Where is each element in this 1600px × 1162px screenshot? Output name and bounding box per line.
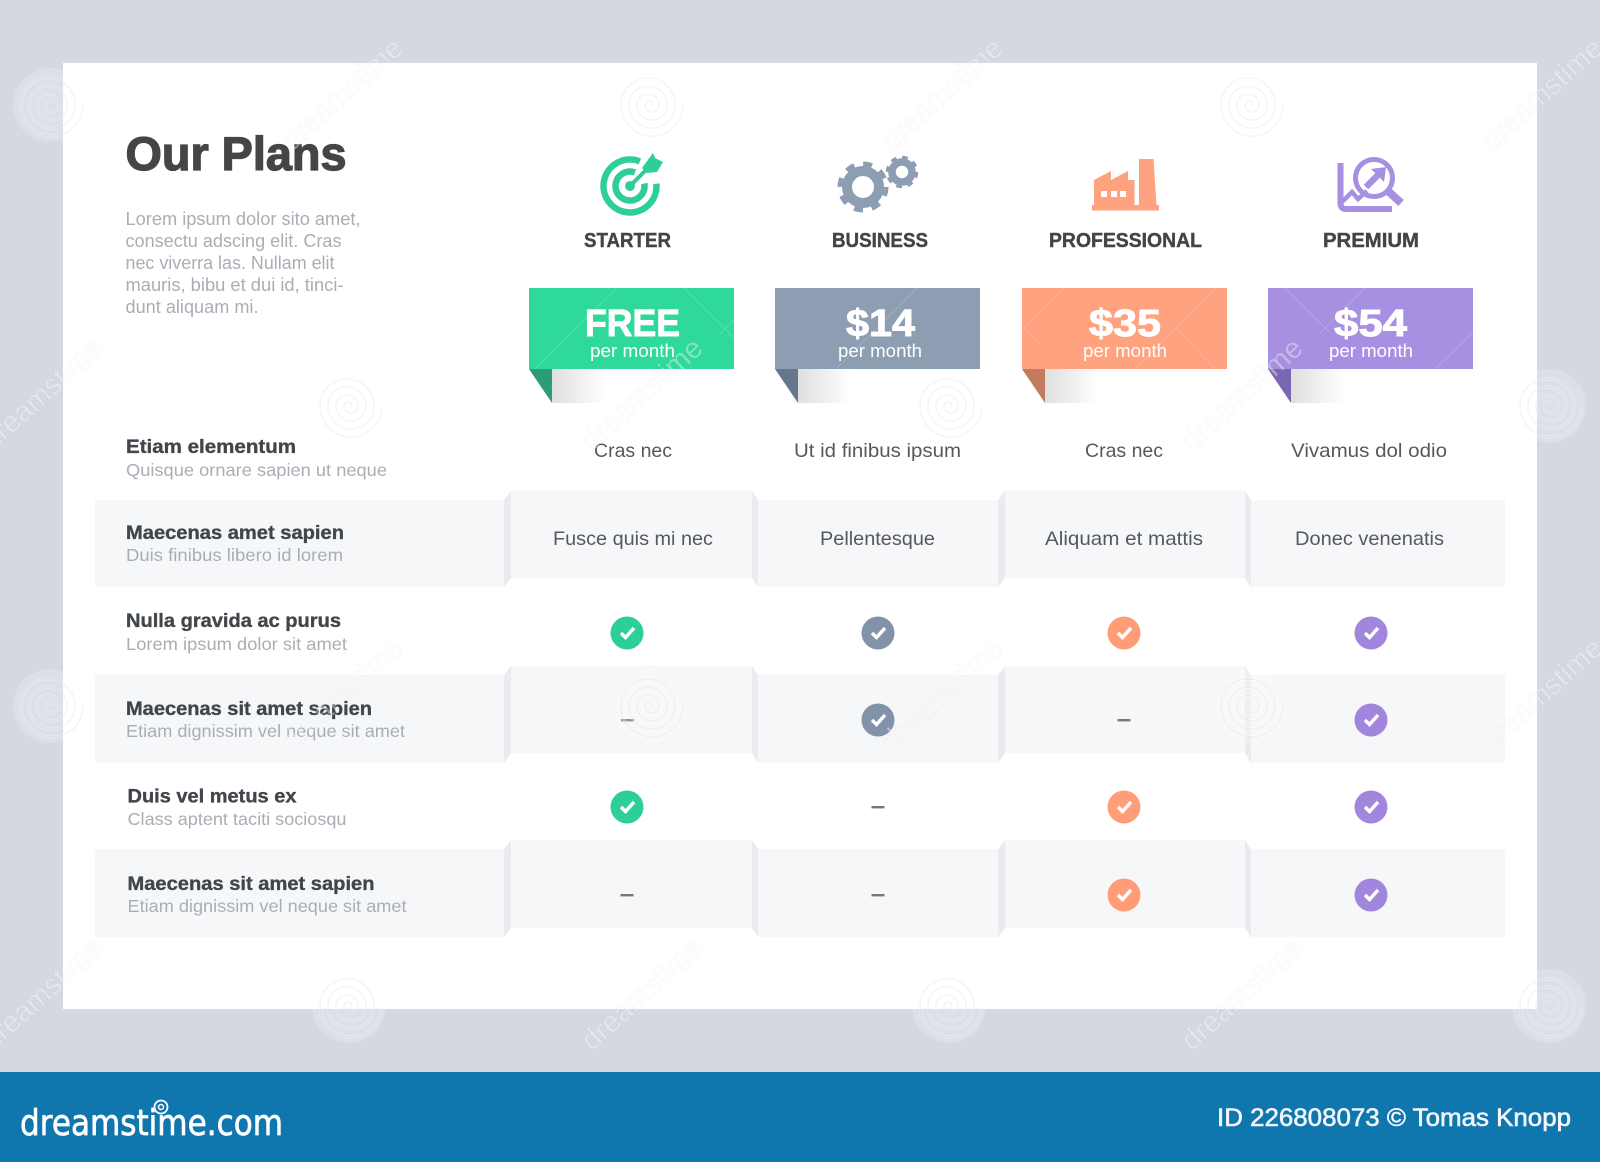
row label: Duis finibus libero id lorem bbox=[126, 545, 343, 565]
watermark overlay: dreamstime bbox=[1175, 932, 1309, 1057]
row label: Lorem ipsum dolor sit amet bbox=[126, 634, 347, 654]
row label bbox=[126, 699, 405, 741]
price badge: FREE bbox=[585, 303, 680, 345]
row values: Vivamus dol odio bbox=[1291, 440, 1447, 462]
row label: Quisque ornare sapien ut neque bbox=[126, 460, 387, 480]
price badge bbox=[1268, 288, 1473, 403]
watermark overlay: dreamstime bbox=[575, 932, 709, 1057]
check: starter bbox=[610, 790, 644, 824]
price badge bbox=[529, 288, 734, 403]
check: business bbox=[862, 616, 894, 650]
check: premium bbox=[1354, 704, 1388, 736]
icon: magnifier over chart bbox=[1340, 160, 1401, 209]
dash: professional bbox=[1118, 719, 1130, 721]
plan name: PREMIUM bbox=[1323, 230, 1419, 252]
plan: business bbox=[775, 158, 980, 403]
plan: professional bbox=[1022, 159, 1227, 403]
row label bbox=[126, 437, 387, 480]
price badge bbox=[775, 288, 980, 403]
icon: target with arrow bbox=[603, 153, 663, 212]
dash: starter bbox=[621, 719, 634, 721]
footer bar bbox=[0, 1072, 1600, 1162]
intro text block: dunt aliquam mi. bbox=[126, 297, 258, 317]
row values: Donec venenatis bbox=[1295, 528, 1444, 550]
row label: Maecenas sit amet sapien bbox=[128, 874, 374, 895]
plan name: STARTER bbox=[584, 230, 672, 252]
check: professional bbox=[1108, 790, 1140, 824]
row values: Pellentesque bbox=[820, 528, 935, 550]
row values: Cras nec bbox=[594, 440, 672, 462]
row label: Maecenas sit amet sapien bbox=[126, 699, 372, 720]
price badge: per month bbox=[838, 341, 922, 361]
row label: Duis vel metus ex bbox=[128, 786, 297, 808]
row label: Etiam elementum bbox=[126, 437, 296, 458]
row label bbox=[128, 786, 346, 829]
row 6 band bbox=[95, 840, 1505, 937]
price badge: per month bbox=[590, 341, 675, 361]
row 1 bbox=[126, 437, 1447, 480]
watermark overlay: dreamstime bbox=[875, 32, 1009, 157]
watermark overlay: dreamstime bbox=[1175, 332, 1309, 457]
check: premium bbox=[1354, 790, 1388, 824]
watermark overlay: dreamstime bbox=[575, 332, 709, 457]
check: professional bbox=[1108, 878, 1140, 912]
dash: starter bbox=[620, 894, 634, 896]
row values: Ut id finibus ipsum bbox=[794, 440, 961, 462]
intro text block: Lorem ipsum dolor sito amet, bbox=[126, 209, 360, 229]
row 2 band bbox=[95, 491, 1505, 587]
price badge: $35 bbox=[1089, 303, 1161, 345]
title: Our Plans bbox=[126, 127, 346, 180]
check: premium bbox=[1354, 616, 1388, 650]
price badge: per month bbox=[1083, 341, 1167, 361]
footer logo: dreamstime.com bbox=[20, 1103, 283, 1144]
icon: gears bbox=[840, 158, 916, 210]
row label: Etiam dignissim vel neque sit amet bbox=[128, 896, 407, 916]
row values bbox=[594, 440, 1447, 462]
row 5 bbox=[128, 786, 1388, 829]
row label bbox=[128, 874, 407, 916]
row label: Nulla gravida ac purus bbox=[126, 611, 341, 632]
check: starter bbox=[610, 616, 644, 650]
check: professional bbox=[1108, 616, 1140, 650]
row values: Cras nec bbox=[1085, 440, 1163, 462]
price badge: per month bbox=[1329, 341, 1413, 361]
plan name: BUSINESS bbox=[832, 230, 928, 252]
intro text block: consectu adscing elit. Cras bbox=[126, 231, 342, 251]
white card panel bbox=[63, 63, 1537, 1009]
footer credit: ID 226808073 © Tomas Knopp bbox=[1217, 1104, 1571, 1132]
row values: Fusce quis mi nec bbox=[553, 528, 713, 550]
check: premium bbox=[1354, 878, 1388, 912]
watermark overlay: dreamstime bbox=[275, 32, 409, 157]
row values: Aliquam et mattis bbox=[1045, 528, 1203, 550]
comparison table bbox=[95, 437, 1505, 937]
row 3 bbox=[126, 611, 1388, 654]
row label bbox=[126, 523, 344, 565]
intro text block: mauris, bibu et dui id, tinci- bbox=[126, 275, 344, 295]
price badge: $14 bbox=[846, 303, 915, 345]
watermark overlay: dreamstime bbox=[875, 632, 1009, 757]
row values bbox=[553, 528, 1444, 550]
row label bbox=[126, 611, 347, 654]
row 4 band bbox=[95, 666, 1505, 763]
intro text block bbox=[126, 209, 360, 317]
watermark overlay: dreamstime bbox=[275, 632, 409, 757]
plan: premium bbox=[1268, 160, 1473, 403]
plan name: PROFESSIONAL bbox=[1049, 230, 1202, 252]
dash: business bbox=[872, 894, 884, 896]
price badge: $54 bbox=[1334, 303, 1407, 345]
row label: Maecenas amet sapien bbox=[126, 523, 344, 544]
dash: business bbox=[872, 806, 884, 808]
check: business bbox=[862, 704, 894, 736]
price badge bbox=[1022, 288, 1227, 403]
icon: factory bbox=[1092, 159, 1159, 210]
plan: starter bbox=[529, 153, 734, 403]
row label: Class aptent taciti sociosqu bbox=[128, 809, 346, 829]
row label: Etiam dignissim vel neque sit amet bbox=[126, 721, 405, 741]
intro text block: nec viverra las. Nullam elit bbox=[126, 253, 334, 273]
